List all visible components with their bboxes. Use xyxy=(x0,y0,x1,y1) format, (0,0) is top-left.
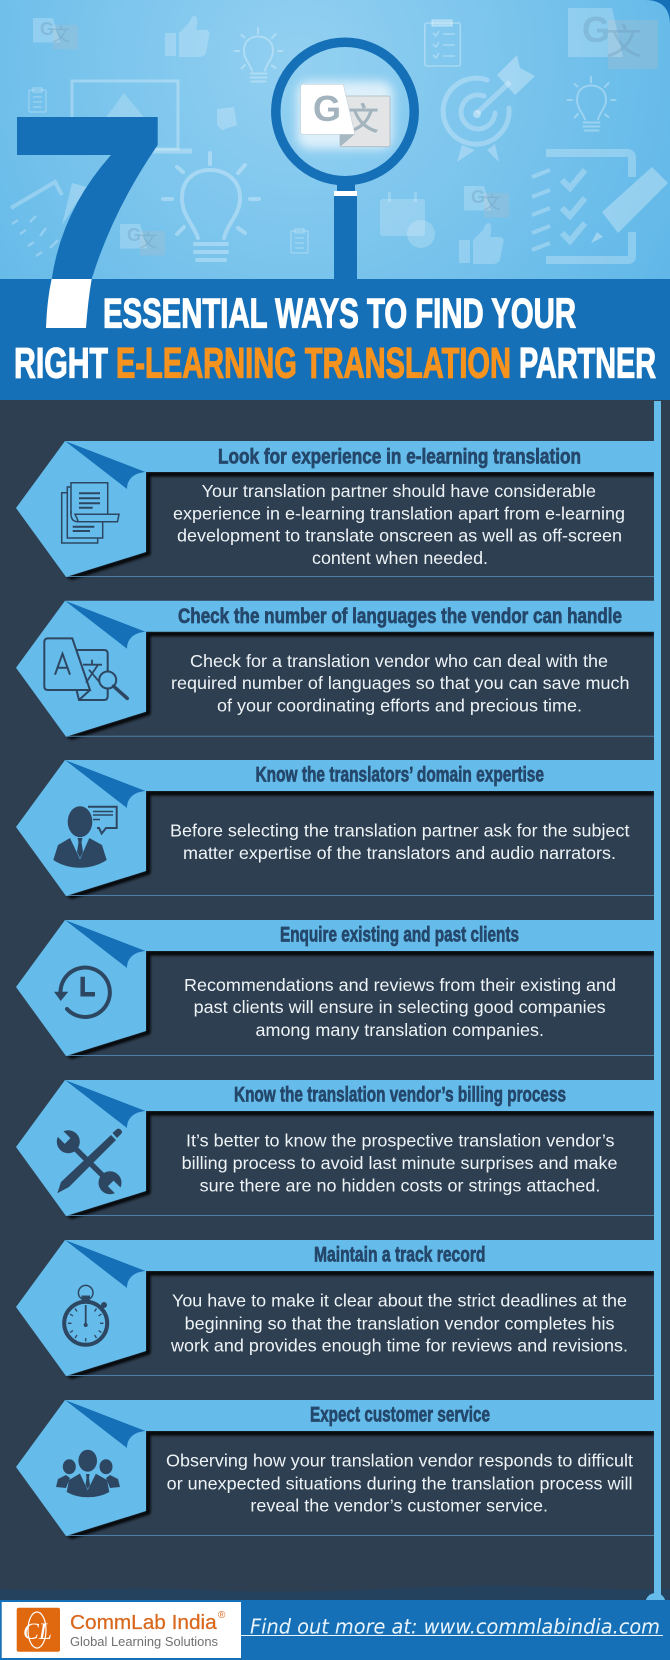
background icon: thumbs up lower xyxy=(459,223,504,264)
panel: step 2 xyxy=(16,601,654,740)
background icon: translate large: G xyxy=(582,9,610,50)
background icon: translate lower-right: 文 xyxy=(483,189,501,215)
background icon: light bulb right xyxy=(568,77,616,130)
timeline rail xyxy=(646,401,666,1613)
step 7 body: reveal the vendor’s customer service. xyxy=(250,1496,548,1516)
logo: CommLab India: Global Learning Solutions xyxy=(70,1634,218,1649)
header panel xyxy=(0,0,670,400)
background icon: thumbs up xyxy=(165,16,210,57)
panel: step 6 xyxy=(16,1240,654,1379)
big numeral 7 xyxy=(17,117,158,328)
step 2 body: required number of languages so that you can save much xyxy=(171,673,630,693)
background icon: translate centre-left xyxy=(120,224,165,256)
step 3 heading: Know the translators’ domain expertise xyxy=(256,764,544,787)
step 1 body: Your translation partner should have considerable xyxy=(202,481,596,501)
background icon: translate lower-right: G xyxy=(471,187,485,207)
footer xyxy=(0,1600,670,1660)
step 6 body: You have to make it clear about the strict deadlines at the xyxy=(172,1291,627,1311)
background icon: translate small: 文 xyxy=(52,21,70,47)
icon: translate xyxy=(297,81,393,149)
step 1 body xyxy=(173,481,625,568)
background icon: translate large: 文 xyxy=(606,13,642,65)
icon: translate: G xyxy=(313,88,341,129)
panel: step 7 xyxy=(16,1400,654,1539)
background icon: paper xyxy=(217,107,237,130)
logo: CommLab India: ® xyxy=(218,1610,226,1621)
step 1 body: experience in e-learning translation apart from e-learning xyxy=(173,504,625,524)
step 7 heading: Expect customer service xyxy=(310,1404,490,1427)
background icon: translate lower-right xyxy=(464,186,509,218)
magnifying glass xyxy=(276,42,414,279)
step 5 body: It’s better to know the prospective translation vendor’s xyxy=(186,1131,615,1151)
background icon: translate centre-left: G xyxy=(127,225,141,245)
icon: translate: 文 xyxy=(347,94,379,140)
step 2 body: Check for a translation vendor who can deal with the xyxy=(190,651,608,671)
panel: step 5 xyxy=(16,1080,654,1219)
logo: CommLab India xyxy=(2,1602,241,1658)
background icon: translate centre-left: 文 xyxy=(139,227,157,253)
step 4 heading: Enquire existing and past clients xyxy=(280,924,519,947)
step 1 body: content when needed. xyxy=(312,548,488,568)
step 1 body: development to translate onscreen as well as off-screen xyxy=(177,526,622,546)
background icon: light bulb xyxy=(234,28,282,82)
step 1 heading: Look for experience in e-learning translation xyxy=(218,445,581,468)
wave band above footer xyxy=(0,1586,670,1600)
background icon: translate small: G xyxy=(40,19,54,39)
background icon: clipboard xyxy=(425,20,460,66)
title line 2: RIGHT xyxy=(14,340,108,388)
icon: wrench and pencil xyxy=(56,1129,123,1195)
step 6 heading: Maintain a track record xyxy=(314,1244,486,1267)
step 5 body: billing process to avoid last minute surprises and make xyxy=(182,1153,618,1173)
icon: translate and magnifier xyxy=(44,638,127,700)
step 7 body xyxy=(166,1451,633,1516)
step 4 body: Recommendations and reviews from their existing and xyxy=(184,975,616,995)
step 2 body: of your coordinating efforts and precious time. xyxy=(217,696,582,716)
step 2 body xyxy=(171,651,630,716)
step 4 body: among many translation companies. xyxy=(256,1020,544,1040)
step 3 body: Before selecting the translation partner ask for the subject xyxy=(170,821,630,841)
background icon: translate small xyxy=(33,18,78,50)
background icon: clipboard small xyxy=(29,88,46,112)
step 6 body xyxy=(170,1291,628,1356)
background icon: target with arrow xyxy=(443,55,535,162)
step 5 body xyxy=(182,1131,618,1196)
panel: step 3 xyxy=(16,760,654,899)
step 7 body: Observing how your translation vendor responds to difficult xyxy=(166,1451,633,1471)
step 5 body: sure there are no hidden costs or strings attached. xyxy=(200,1176,600,1196)
step 7 body: or unexpected situations during the translation process will xyxy=(167,1473,632,1493)
step 6 body: work and provides enough time for reviews and revisions. xyxy=(170,1336,628,1356)
background icon: translate large xyxy=(568,8,658,69)
background icon: calendar with clock xyxy=(380,192,435,248)
icon: stopwatch xyxy=(64,1285,107,1345)
icon: clock with back arrow xyxy=(54,968,110,1017)
link: find out more: Find out more at: www.commlabindia.com xyxy=(250,1614,660,1638)
background icon: checklist left xyxy=(11,182,87,256)
step 4 body: past clients will ensure in selecting good companies xyxy=(194,997,606,1017)
icon: expert with speech bubble xyxy=(53,806,117,868)
logo: CommLab India: CL xyxy=(23,1619,52,1644)
step 3 body: matter expertise of the translators and audio narrators. xyxy=(183,843,616,863)
background icon: large light bulb xyxy=(163,153,259,260)
icon: team xyxy=(56,1450,120,1497)
step 3 body xyxy=(170,821,630,863)
background icon: laptop with house xyxy=(60,81,192,151)
step 4 body xyxy=(184,975,616,1040)
background icon: checklist with pencil xyxy=(532,153,668,260)
step 6 body: beginning so that the translation vendor completes his xyxy=(185,1313,615,1333)
panel: step 4 xyxy=(16,920,654,1059)
icon: documents xyxy=(62,483,119,543)
logo: CommLab India: CommLab India xyxy=(70,1611,217,1634)
panel: step 1 xyxy=(16,441,654,580)
background icon: clipboard lower xyxy=(291,229,308,253)
